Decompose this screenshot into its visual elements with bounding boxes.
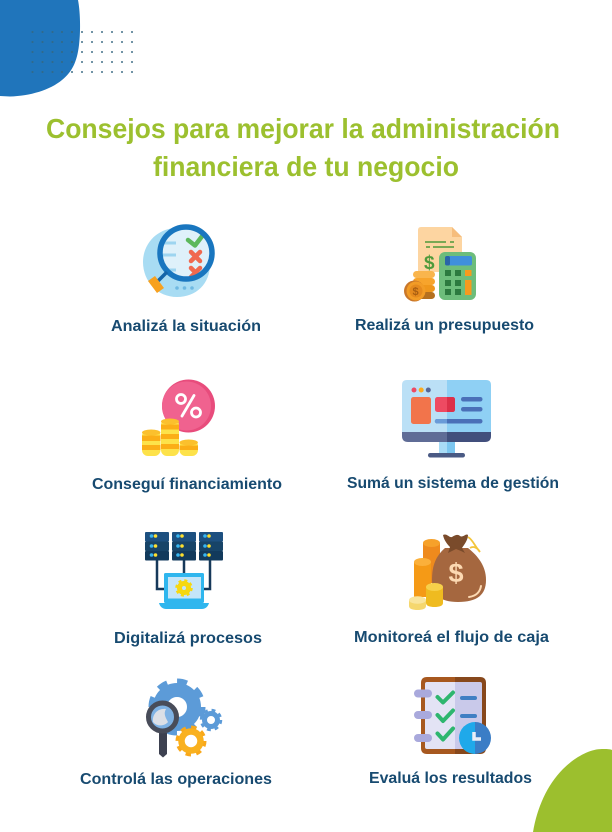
item: Monitoreá el flujo de caja xyxy=(354,535,549,646)
icon: gears and magnifying glass xyxy=(148,681,221,758)
label: Sumá un sistema de gestión xyxy=(347,475,559,492)
item: Digitalizá procesos xyxy=(114,532,262,647)
item: Evaluá los resultados xyxy=(369,677,532,787)
dot grid decoration xyxy=(32,31,133,73)
title: financiera de tu negocio xyxy=(153,151,459,182)
icon: money bag with coins: $ xyxy=(448,558,464,588)
icon: checklist notebook with clock xyxy=(414,677,491,754)
icon: invoice, calculator and coins: $ xyxy=(424,253,435,274)
item: Conseguí financiamiento xyxy=(92,380,282,493)
item: Realizá un presupuesto xyxy=(355,227,534,334)
dot grid over the blue blob xyxy=(32,31,73,73)
title: Consejos para mejorar la administración xyxy=(46,113,560,144)
icon: percent badge and coin stacks xyxy=(142,380,215,456)
blue corner blob xyxy=(0,0,80,96)
icon: desktop monitor with dashboard xyxy=(402,380,491,458)
label: Realizá un presupuesto xyxy=(355,317,534,334)
label: Conseguí financiamiento xyxy=(92,476,282,493)
label: Monitoreá el flujo de caja xyxy=(354,629,549,646)
icon: invoice, calculator and coins: $ xyxy=(412,286,419,298)
item: Analizá la situación xyxy=(111,227,261,335)
item: Controlá las operaciones xyxy=(80,681,272,788)
title xyxy=(46,113,560,182)
icon: invoice, calculator and coins xyxy=(404,227,476,302)
icon: magnifying glass over checklist xyxy=(143,227,212,297)
green corner blob xyxy=(533,749,612,832)
item: Sumá un sistema de gestión xyxy=(347,380,559,492)
label: Analizá la situación xyxy=(111,318,261,335)
label: Evaluá los resultados xyxy=(369,770,532,787)
icon: money bag with coins xyxy=(409,535,486,610)
label: Digitalizá procesos xyxy=(114,630,262,647)
icon: servers connected to laptop xyxy=(145,532,223,609)
label: Controlá las operaciones xyxy=(80,771,272,788)
